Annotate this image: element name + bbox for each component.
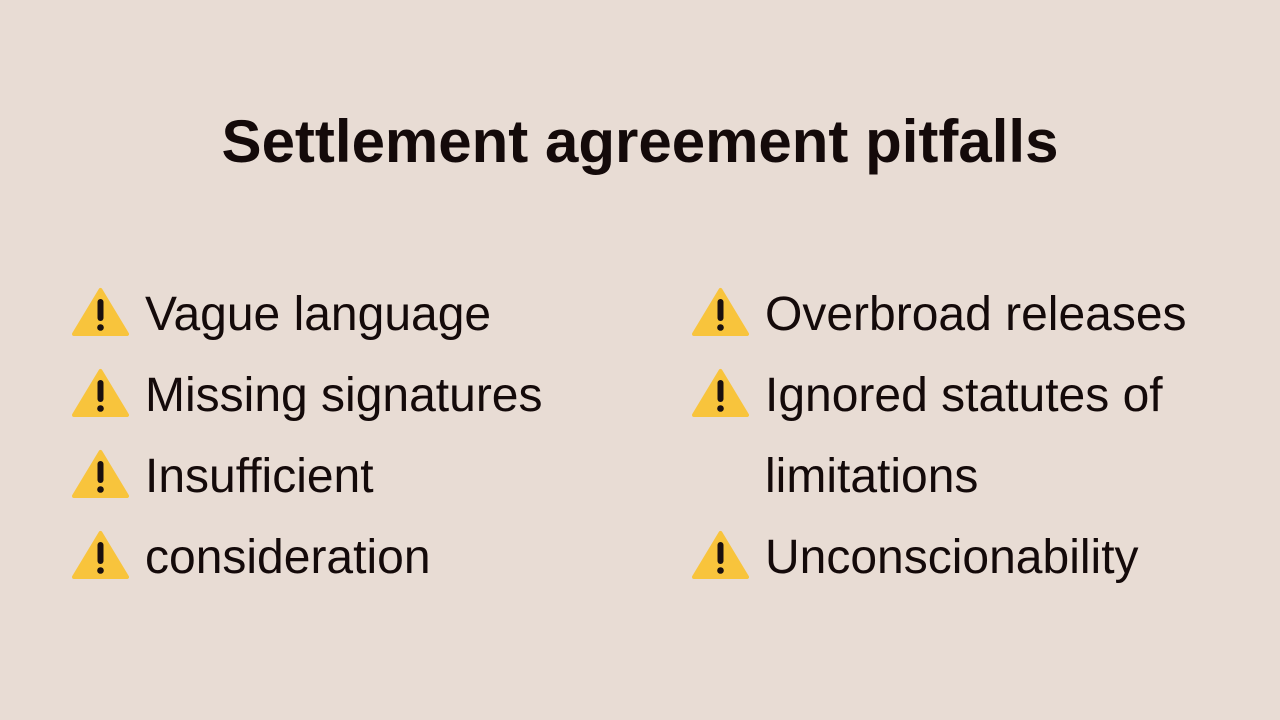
item: vague language: Vague language [145, 288, 491, 341]
item: missing signatures: Missing signatures [145, 369, 542, 422]
item: unconscionability: Unconscionability [765, 531, 1139, 584]
title: Settlement agreement pitfalls [222, 108, 1058, 175]
item: insufficient: Insufficient [145, 450, 374, 503]
item: ignored statutes of limitations: Ignored statutes of [765, 369, 1163, 422]
item: ignored statutes of limitations: limitations [765, 450, 978, 503]
item: overbroad releases: Overbroad releases [765, 288, 1187, 341]
item: ignored statutes of limitations [692, 368, 1163, 503]
item: consideration: consideration [145, 531, 431, 584]
